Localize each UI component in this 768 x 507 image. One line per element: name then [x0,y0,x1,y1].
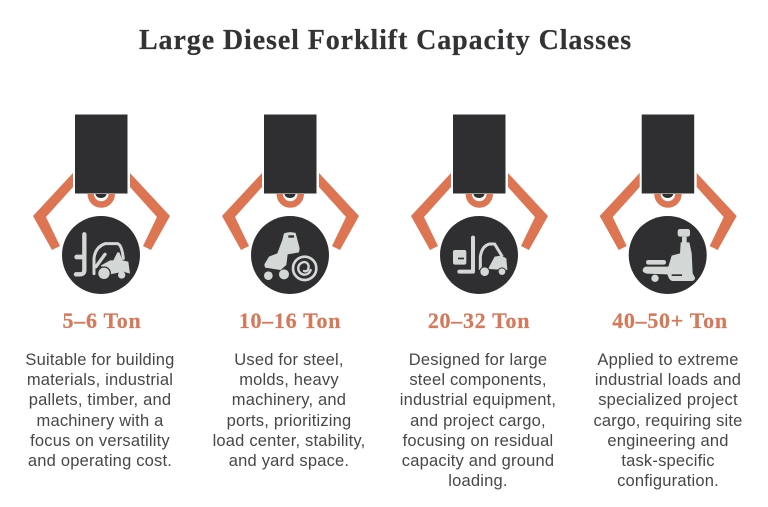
text: 40–50+ Ton description: cargo, requiring site [593,412,743,430]
text: 5–6 Ton description: Suitable for building [25,351,175,369]
heading: 40–50+ Ton: 40–50+ Ton [612,308,728,333]
text: 20–32 Ton description: and project cargo, [410,412,546,430]
text: 5–6 Ton description: focus on versatility [30,432,170,450]
text: 5–6 Ton description [25,351,175,470]
heading: 10–16 Ton: 10–16 Ton [239,308,341,333]
text: 20–32 Ton description: focusing on residual [403,432,553,450]
text: 10–16 Ton description: molds, heavy [239,371,339,389]
text: 40–50+ Ton description: configuration. [617,472,719,490]
text: 40–50+ Ton description [593,351,743,490]
text: 10–16 Ton description: and yard space. [229,452,349,470]
text: 20–32 Ton description: steel components, [409,371,547,389]
text: 10–16 Ton description: load center, stability, [213,432,365,450]
text: 5–6 Ton description: pallets, timber, and [29,391,171,409]
text: 40–50+ Ton description: task-specific [621,452,715,470]
text: 40–50+ Ton description: Applied to extreme [597,351,739,369]
text: 40–50+ Ton description: specialized project [598,391,738,409]
text: 40–50+ Ton description: industrial loads and [595,371,741,389]
heading: 5–6 Ton: 5–6 Ton [63,308,141,333]
text: 10–16 Ton description: ports, prioritizing [227,412,351,430]
icon: claw with forklift, 5–6 ton [33,114,170,294]
text: 10–16 Ton description: machinery, and [232,391,346,409]
text: 5–6 Ton description: materials, industrial [27,371,173,389]
text: 20–32 Ton description: loading. [448,472,508,490]
title: Large Diesel Forklift Capacity Classes [139,25,632,56]
text: 20–32 Ton description [400,351,556,490]
text: 10–16 Ton description: Used for steel, [234,351,344,369]
text: 40–50+ Ton description: engineering and [607,432,729,450]
icon: claw with pallet truck, 40–50+ ton [600,114,737,294]
text: 10–16 Ton description [213,351,365,470]
text: 20–32 Ton description: Designed for large [409,351,547,369]
icon: claw with forklift and load, 20–32 ton [411,114,548,294]
heading: 20–32 Ton: 20–32 Ton [428,308,530,333]
text: 5–6 Ton description: machinery with a [36,412,164,430]
text: 20–32 Ton description: industrial equipment, [400,391,556,409]
text: 5–6 Ton description: and operating cost. [28,452,172,470]
text: 20–32 Ton description: capacity and ground [402,452,554,470]
icon: claw with roller and coil, 10–16 ton [222,114,359,294]
